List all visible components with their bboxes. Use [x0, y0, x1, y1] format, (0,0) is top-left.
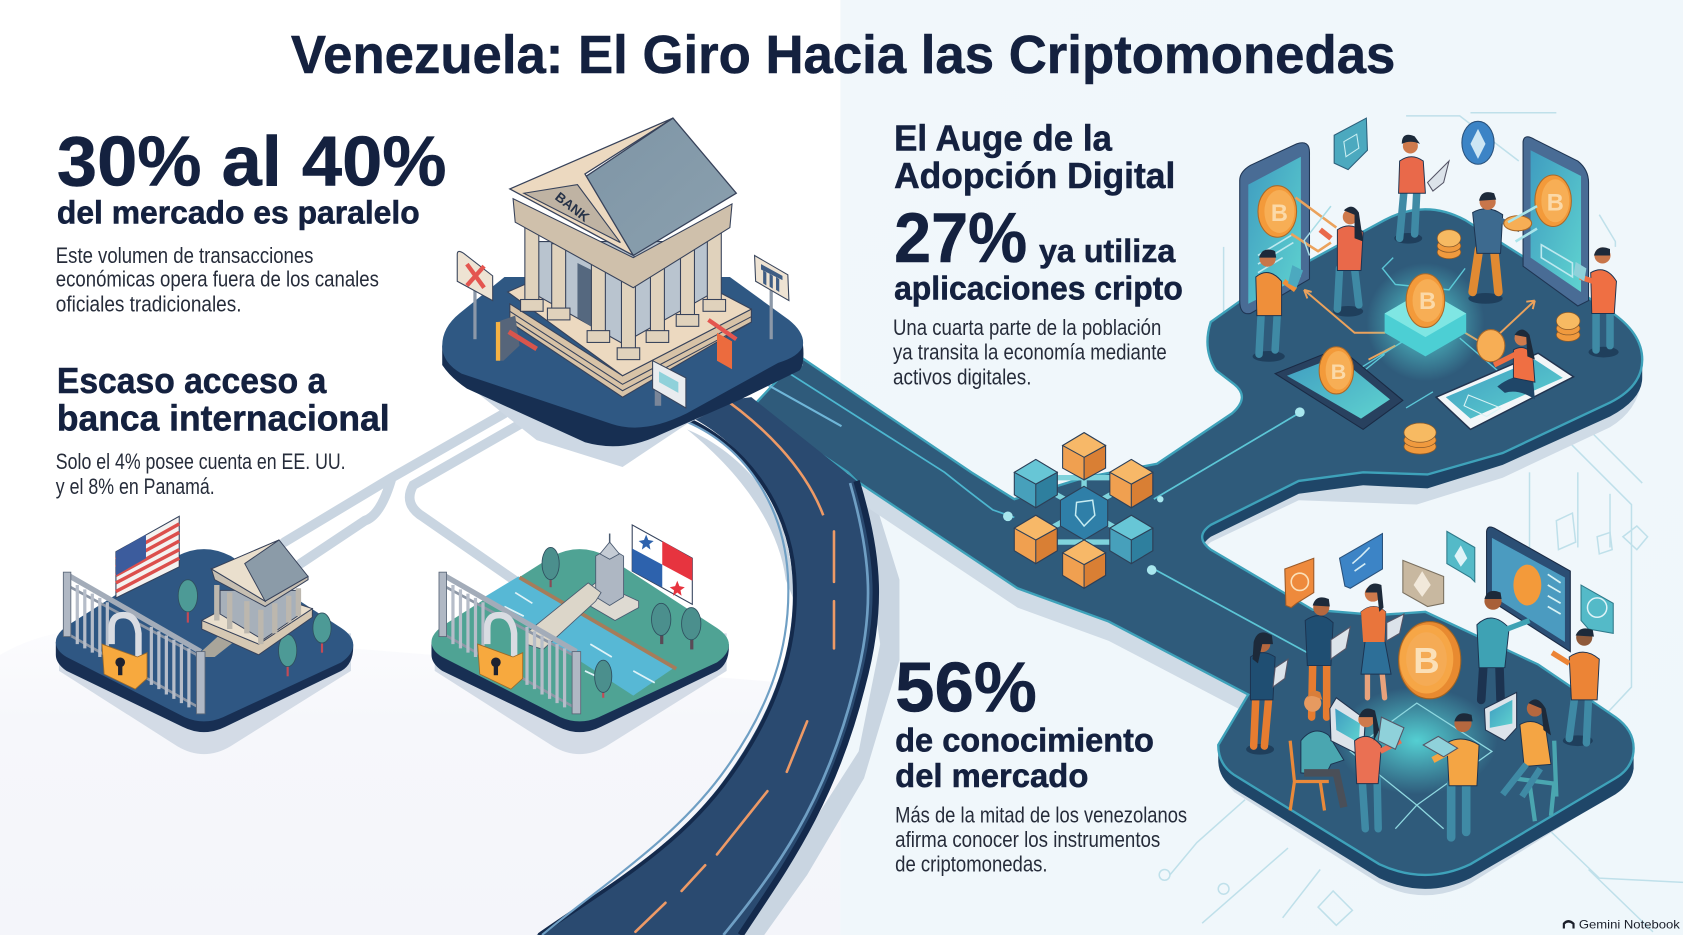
coin on right phone: B [1547, 190, 1564, 216]
text block: digital adoption: ya transita la economía mediante [893, 340, 1167, 365]
cube: center hexagon [1060, 486, 1108, 540]
stat label: del mercado es paralelo [57, 194, 420, 230]
heading: digital adoption: Adopción Digital [894, 155, 1175, 196]
text block: digital adoption [893, 315, 1167, 389]
person: woman left [1246, 632, 1288, 755]
flat phone left [1275, 348, 1403, 429]
blockchain cubes [1014, 433, 1153, 588]
center coin [1406, 274, 1445, 327]
bubble blue [1340, 534, 1382, 588]
coin on right phone [1535, 175, 1571, 227]
coin stack [1556, 312, 1580, 341]
fence [63, 572, 205, 714]
bank inner wall [537, 242, 708, 344]
panel: Panama platform [431, 525, 729, 754]
scene: crypto knowledge [1246, 527, 1613, 837]
coin on left phone [1258, 186, 1297, 237]
bank pediment [524, 185, 620, 243]
person: man tablet [1305, 597, 1350, 717]
tree [279, 634, 297, 676]
tree [682, 608, 701, 649]
text block: international banking [56, 449, 346, 499]
text block: parallel market [56, 243, 379, 316]
orange flow arrows [1304, 290, 1535, 360]
man yellow with tablet [1423, 713, 1479, 837]
tree [542, 547, 559, 587]
stat: 27%: aplicaciones cripto [894, 270, 1183, 308]
text block: market knowledge [895, 802, 1187, 877]
stat: 56%: del mercado [895, 758, 1088, 795]
platform top [431, 549, 729, 721]
sign: red cross [457, 251, 493, 339]
text block: parallel market: Este volumen de transacciones [56, 243, 313, 268]
tree [652, 603, 671, 644]
padlock [102, 615, 147, 689]
person: man at screen [1477, 591, 1530, 700]
large screen [1487, 527, 1570, 652]
stat: 56% [895, 649, 1154, 795]
flat phone right [1436, 353, 1574, 429]
bubble orange [1285, 558, 1314, 608]
heading: digital adoption [894, 117, 1175, 196]
text block: digital adoption: Una cuarta parte de la población [893, 315, 1161, 340]
platform circuit paths [1331, 258, 1497, 408]
Panama flag [632, 525, 692, 604]
coin on left phone: B [1271, 201, 1288, 227]
text block: international banking: y el 8% en Panamá. [56, 474, 215, 499]
bridge [526, 583, 601, 649]
person with long hair [1320, 207, 1363, 317]
seated man with chair [1290, 691, 1365, 810]
road shadows [687, 429, 899, 935]
platform shadow [435, 633, 727, 754]
bank columns [521, 227, 726, 360]
person right with tablet [1574, 247, 1619, 357]
coin above flat phone: B [1331, 360, 1346, 384]
tree [595, 660, 612, 698]
text block: market knowledge: afirma conocer los instrumentos [895, 827, 1160, 852]
bank entablature [513, 199, 732, 288]
floor network lines [1350, 703, 1492, 829]
road [537, 376, 876, 935]
platform base [431, 642, 729, 732]
faint circuit lines, lower right [1159, 113, 1683, 932]
coin stack [1437, 230, 1461, 259]
heading: international banking [57, 360, 390, 438]
bank door [577, 263, 592, 327]
stat: 56%: 56% [895, 649, 1037, 728]
tree [178, 580, 197, 623]
bank platform [442, 277, 803, 467]
person with laptop [1394, 135, 1449, 244]
woman coral with tablet [1355, 708, 1404, 829]
center glowing cube [1366, 263, 1484, 381]
US flag [116, 516, 179, 598]
coin above flat phone [1319, 347, 1353, 394]
path to mini bank [195, 625, 245, 657]
scene: crypto adoption [1240, 118, 1619, 454]
text block: market knowledge: Más de la mitad de los venezolanos [895, 802, 1187, 827]
person: man right [1552, 628, 1599, 746]
text block: international banking: Solo el 4% posee cuenta en EE. UU. [56, 449, 346, 474]
title: Venezuela: El Giro Hacia las Criptomonedas [291, 25, 1395, 85]
platform base [56, 642, 353, 732]
stat: 30% al 40%: 30% al 40% [57, 123, 447, 202]
arrows on phones [1291, 198, 1537, 255]
heading: digital adoption: El Auge de la [894, 117, 1113, 158]
person left with tablet [1253, 250, 1303, 362]
person: woman skirt [1361, 583, 1404, 698]
platform shadow [59, 633, 351, 754]
center coin: B [1419, 289, 1436, 315]
cube: left teal [1014, 459, 1057, 508]
heading: international banking: banca internacional [57, 397, 390, 438]
icon: cube token [1334, 118, 1367, 170]
seated person on phone [1477, 330, 1535, 399]
stat: 27%: 27% [894, 199, 1027, 278]
brand mark: Gemini Notebook [1579, 918, 1681, 932]
padlock [478, 615, 523, 689]
river [483, 576, 674, 696]
floor glow [1336, 687, 1497, 794]
faint connector lines to the small platforms [284, 413, 526, 588]
text block: market knowledge: de criptomonedas. [895, 852, 1048, 877]
tree [313, 613, 331, 653]
cube: lower left orange [1014, 515, 1057, 564]
panel: USA platform [56, 516, 353, 754]
big bitcoin coin: B [1413, 640, 1440, 681]
mini bank [202, 540, 312, 655]
big bitcoin coin [1399, 622, 1461, 699]
bubble teal [1447, 531, 1475, 582]
cube: bottom orange [1063, 540, 1106, 588]
cube: top orange [1063, 433, 1106, 480]
stat: 27% [894, 199, 1183, 308]
sign: bank icon [755, 255, 789, 339]
cube: right orange [1110, 459, 1153, 508]
phone right [1523, 137, 1589, 306]
phone left [1240, 143, 1309, 314]
stat: 56%: de conocimiento [895, 722, 1154, 759]
cube: lower right teal [1110, 515, 1153, 564]
bank building [508, 118, 751, 397]
platform top [56, 549, 353, 721]
bank label: BANK [552, 189, 592, 225]
bubble teal clock [1581, 585, 1613, 633]
small kiosk sign [653, 361, 686, 408]
tower [582, 534, 639, 620]
bubble tan [1403, 560, 1444, 607]
text block: parallel market: económicas opera fuera de los canales [56, 267, 379, 292]
stat: 27%: ya utiliza [1039, 233, 1176, 269]
fence [439, 572, 581, 714]
icon: ethereum token [1462, 121, 1494, 164]
bank base steps [508, 242, 751, 397]
bank roof slate [585, 118, 736, 255]
coin stack [1404, 423, 1436, 454]
person holding coin [1468, 192, 1532, 304]
network ribbon and crypto platforms [751, 209, 1642, 895]
seated woman with chair [1484, 692, 1556, 821]
bank gable [510, 118, 673, 255]
text block: parallel market: oficiales tradicionales. [56, 291, 242, 316]
text block: digital adoption: activos digitales. [893, 364, 1031, 389]
heading: international banking: Escaso acceso a [57, 360, 327, 401]
barrier gates [497, 316, 736, 369]
